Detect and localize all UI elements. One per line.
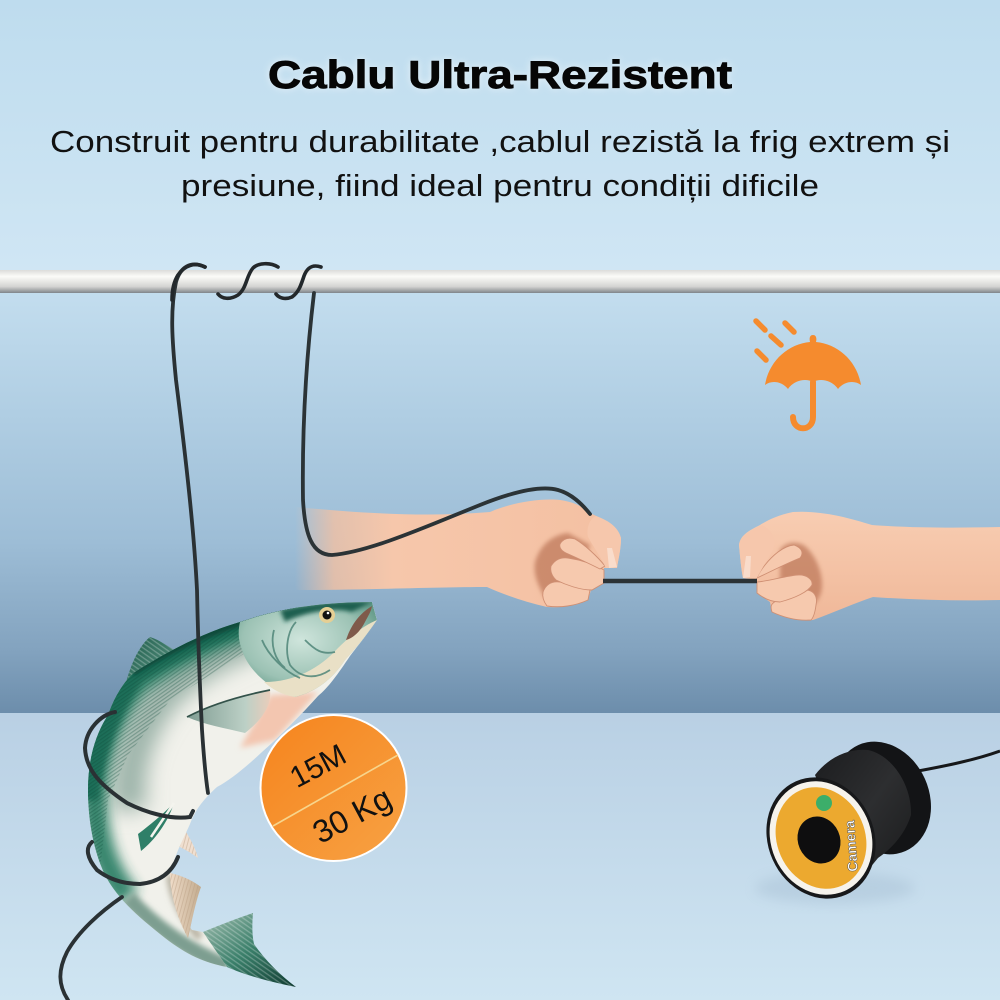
front flange: [747, 760, 895, 916]
horizontal metal bar: [0, 270, 1000, 293]
right arm and fist: [739, 512, 1000, 620]
cable hooks over bar: [172, 264, 321, 300]
fish body shading: [85, 600, 377, 967]
rear ventral fin: [176, 822, 198, 858]
pectoral fin: [187, 690, 270, 733]
head top: [280, 601, 372, 622]
subtitle text block: [50, 125, 950, 203]
cable from bar to left fist: [303, 293, 590, 555]
right thumbnail: [743, 556, 751, 578]
spool shadow: [755, 872, 915, 904]
spool hole: [790, 810, 848, 870]
cable leaving spool: [918, 751, 1000, 771]
wound cable: [815, 750, 911, 880]
weight badge: 15M / 30 Kg: 30 Kg: [307, 779, 397, 851]
title: Cablu Ultra-Rezistent: [268, 54, 732, 97]
left fist fingers: [543, 516, 621, 607]
cable wrapped around fish: [60, 264, 208, 1000]
dorsal fin: [122, 637, 178, 697]
back flange: [815, 726, 949, 870]
title: Cablu Ultra-Rezistent: [268, 54, 732, 97]
fish eye: [319, 607, 335, 623]
pink belly: [240, 692, 318, 748]
left arm and fist: [295, 500, 621, 607]
weight badge: 15M / 30 Kg: 15M: [285, 738, 352, 795]
fish mouth: [346, 606, 372, 640]
lower jaw: [264, 620, 377, 697]
green seal: [816, 795, 832, 811]
head gill lines: [262, 622, 335, 678]
lower body grey edge: [170, 875, 200, 938]
subtitle text block: presiune, fiind ideal pentru condiții dificile: [181, 169, 819, 203]
anal fin: [170, 873, 201, 938]
icon: umbrella with rain: [756, 321, 861, 428]
tail fin: [203, 913, 296, 987]
left thumbnail: [607, 548, 617, 568]
head: [239, 602, 377, 697]
right fist fingers: [739, 525, 817, 620]
yellow label: [760, 773, 882, 903]
left fist shadow: [535, 533, 590, 598]
small ventral fin: [138, 803, 174, 851]
subtitle text block: Construit pentru durabilitate ,cablul rezistă la frig extrem și: [50, 125, 950, 159]
weight badge: 15M / 30 Kg: [260, 715, 406, 861]
cable spool: [747, 726, 1000, 916]
cable between fists: [603, 579, 757, 583]
fish body: [88, 602, 377, 967]
spool brand: Camera: [841, 820, 861, 872]
right fist shadow: [780, 543, 822, 608]
fish: [85, 600, 377, 987]
